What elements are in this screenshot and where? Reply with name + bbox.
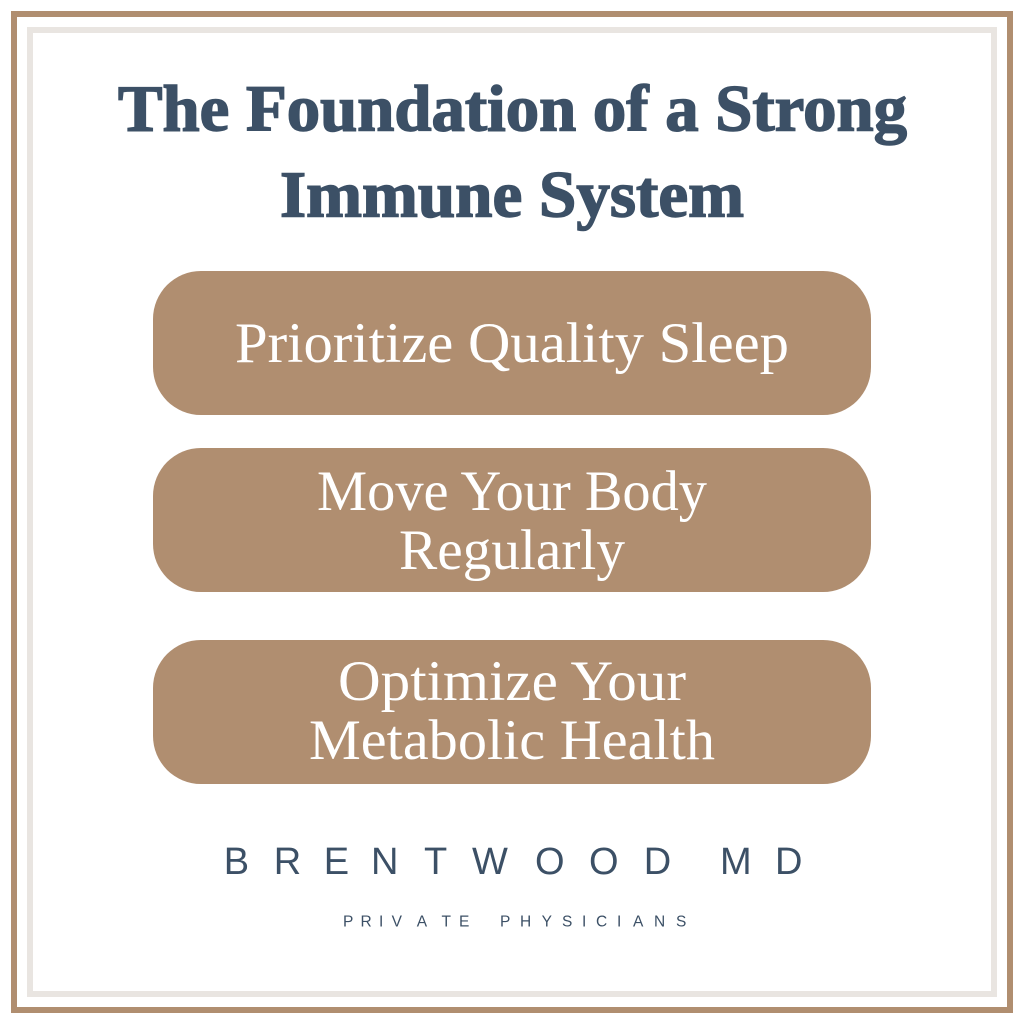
title [118, 72, 907, 232]
panel: prioritize quality sleep: Prioritize Quality Sleep [235, 312, 789, 375]
panel: optimize your metabolic health: Optimize Your [338, 650, 686, 713]
logo: Brentwood MD [224, 841, 802, 930]
panel: optimize your metabolic health [153, 640, 871, 784]
panel: move your body regularly: Move Your Body [317, 460, 707, 523]
logo: Brentwood MD: BRENTWOOD MD [224, 841, 802, 883]
logo tagline: PRIVATE PHYSICIANS [343, 914, 686, 930]
panel: move your body regularly [153, 448, 871, 592]
panel: optimize your metabolic health: Metabolic Health [309, 709, 715, 772]
panel: move your body regularly: Regularly [399, 519, 625, 582]
panel: prioritize quality sleep [153, 271, 871, 415]
title: The Foundation of a Strong [118, 72, 907, 146]
title: Immune System [280, 158, 744, 232]
